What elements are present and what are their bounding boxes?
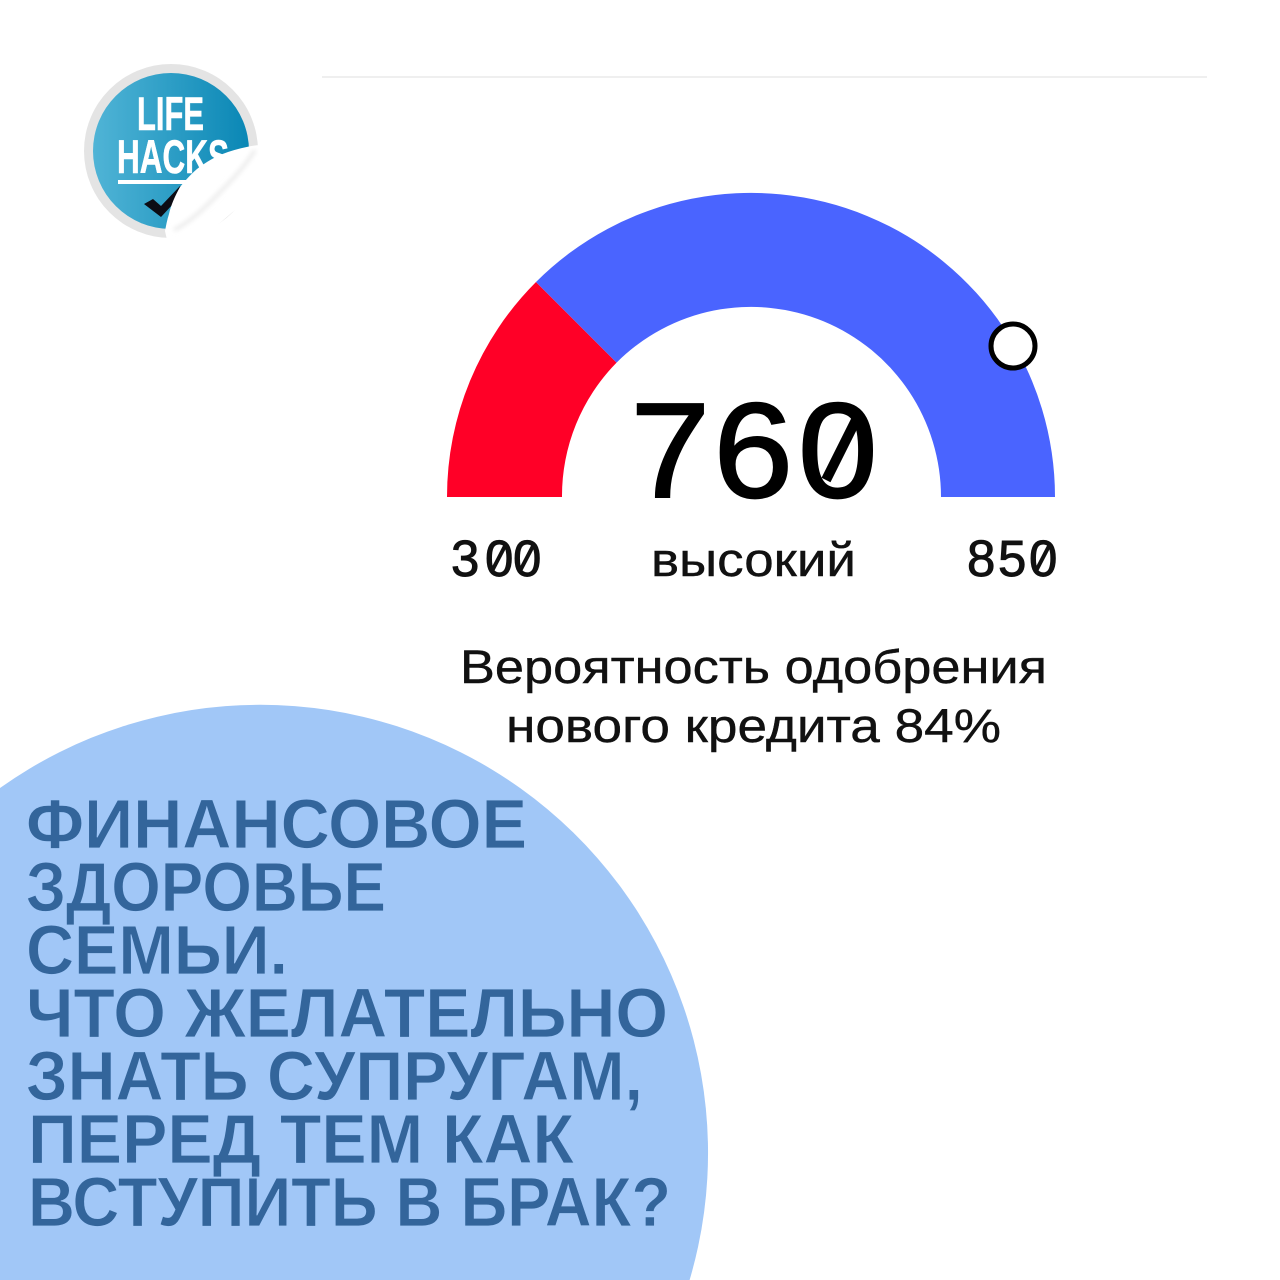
scale minimum: 300 [451,530,541,587]
curl shadow [174,150,255,230]
heading: ЧТО ЖЕЛАТЕЛЬНО [26,974,668,1052]
heading: ФИНАНСОВОЕ [26,785,527,863]
text block: approval probability [460,640,1047,752]
text block: approval probability: Вероятность одобрения [460,640,1047,693]
score value: 760 [630,376,878,526]
heading: СЕМЬИ. [26,911,288,989]
icon: life hacks sticker logo [84,64,270,240]
scale maximum: 850 [967,530,1057,587]
gauge segment: blue high range [536,193,1055,497]
logo underline [118,180,186,184]
heading: ВСТУПИТЬ В БРАК? [28,1163,671,1241]
gauge segment: red low range [447,282,617,497]
rating label: высокий [651,533,856,586]
heading: ПЕРЕД ТЕМ КАК [28,1100,574,1178]
text block: approval probability: нового кредита 84% [506,699,1001,752]
icon: check mark [144,186,180,217]
heading: ЗНАТЬ СУПРУГАМ, [26,1037,643,1115]
panel: blue circle background [0,705,708,1280]
heading: ЗДОРОВЬЕ [26,848,386,926]
logo text: LIFE: LIFE [137,87,204,140]
logo text: HACKS: HACKS [117,130,229,183]
gauge marker [991,324,1035,368]
gauge chart: credit score [447,193,1057,587]
heading [26,785,671,1241]
sticker peeled corner [165,140,270,240]
